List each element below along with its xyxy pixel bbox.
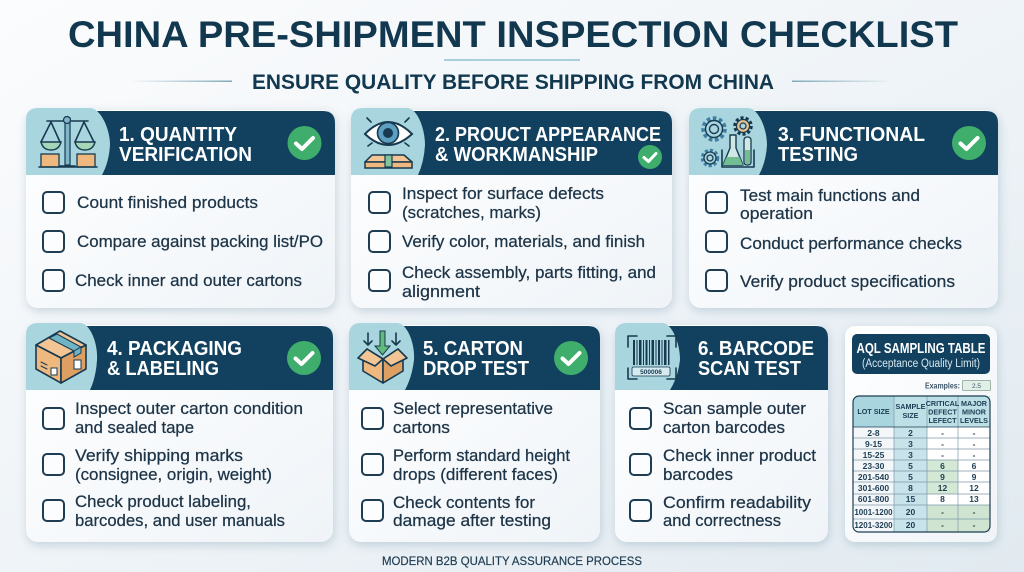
- checklist item: [362, 493, 551, 530]
- sampling table: 20: [906, 507, 915, 517]
- icon: barcode scanner frame: 500006: [640, 369, 662, 376]
- sampling table: 3: [908, 450, 913, 460]
- sampling table: 6: [972, 461, 977, 471]
- panel: 2 product appearance: [351, 108, 672, 308]
- checklist item: [706, 186, 920, 223]
- sampling table: 15-25: [863, 450, 885, 460]
- sampling table: CRITICAL: [926, 399, 960, 408]
- checklist item: Check product labeling,: [75, 492, 251, 511]
- checklist item: carton barcodes: [663, 418, 785, 437]
- heading: 5. CARTON: [423, 338, 523, 360]
- icon: check badge: [554, 341, 588, 375]
- checklist item: [630, 446, 816, 484]
- heading: TESTING: [778, 144, 858, 166]
- checklist item: and correctness: [663, 511, 781, 530]
- sampling table: 1201-3200: [854, 521, 893, 530]
- icon: barcode scanner frame: [628, 336, 676, 379]
- examples legend: Examples:: [925, 382, 960, 390]
- checklist item: Select representative: [393, 399, 553, 418]
- checklist item: [630, 399, 806, 437]
- sampling table: 23-30: [863, 461, 885, 471]
- checklist item: Test main functions and: [740, 186, 920, 205]
- icon: check badge: [287, 341, 321, 375]
- sampling table: DEFECT: [928, 408, 957, 416]
- sampling table: 15: [906, 494, 915, 504]
- checklist item: Inspect outer carton condition: [75, 399, 303, 418]
- icon: check badge: [288, 126, 322, 160]
- sampling table: -: [973, 439, 976, 449]
- heading: & WORKMANSHIP: [435, 144, 598, 166]
- checklist item: Conduct performance checks: [740, 234, 962, 253]
- examples legend: [925, 380, 990, 390]
- heading: [778, 124, 925, 166]
- sampling table: -: [973, 507, 976, 517]
- checklist item: Verify product specifications: [740, 272, 955, 291]
- icon: check badge: [638, 145, 662, 169]
- panel: AQL sampling table: [845, 326, 997, 542]
- checklist item: Check contents for: [393, 493, 535, 512]
- sampling table: -: [941, 450, 944, 460]
- examples legend: 2.5: [972, 383, 981, 390]
- title: CHINA PRE-SHIPMENT INSPECTION CHECKLIST: [68, 14, 958, 55]
- checklist item: (consignee, origin, weight): [75, 465, 272, 484]
- checklist item: [43, 399, 303, 437]
- heading: 1. QUANTITY: [119, 124, 238, 146]
- checklist item: Check inner product: [663, 446, 816, 465]
- panel: 5 carton drop test: [349, 323, 600, 542]
- checklist item: [369, 184, 604, 222]
- sampling table: -: [941, 428, 944, 438]
- footer: MODERN B2B QUALITY ASSURANCE PROCESS: [382, 554, 642, 568]
- sampling table: 201-540: [858, 472, 889, 482]
- heading: DROP TEST: [423, 358, 529, 380]
- table heading: (Acceptance Quality Limit): [862, 358, 980, 370]
- checklist item: Check assembly, parts fitting, and: [402, 263, 656, 282]
- checklist item: [43, 446, 272, 484]
- checklist item: [369, 263, 656, 301]
- checklist item: damage after testing: [393, 511, 551, 530]
- sampling table: -: [973, 520, 976, 530]
- panel: 3 functional testing: [689, 108, 998, 308]
- sampling table: -: [973, 428, 976, 438]
- heading: [698, 338, 814, 380]
- sampling table: LOT SIZE: [857, 407, 890, 416]
- sampling table: [853, 396, 990, 532]
- sampling table: 9-15: [865, 439, 882, 449]
- sampling table: LEVELS: [960, 416, 988, 425]
- checklist item: [362, 446, 570, 484]
- checklist item: operation: [740, 204, 813, 223]
- icon: check badge: [952, 126, 986, 160]
- icon: open carton with drop arrows: [358, 331, 407, 383]
- checklist item: and sealed tape: [75, 418, 194, 437]
- sampling table: 8: [908, 483, 913, 493]
- sampling table: 9: [940, 472, 945, 482]
- checklist item: Confirm readability: [663, 493, 812, 512]
- checklist item: [43, 492, 285, 530]
- sampling table: -: [941, 439, 944, 449]
- sampling table: 8: [940, 494, 945, 504]
- checklist item: [630, 493, 812, 530]
- checklist item: Perform standard height: [393, 446, 570, 465]
- icon: eye over box: [365, 118, 412, 168]
- sampling table: 20: [906, 520, 915, 530]
- heading: VERIFICATION: [119, 144, 252, 166]
- checklist item: Inspect for surface defects: [402, 184, 604, 203]
- checklist item: Count finished products: [77, 193, 258, 212]
- sampling table: -: [973, 450, 976, 460]
- checklist item: cartons: [393, 418, 450, 437]
- sampling table: MINOR: [962, 408, 987, 416]
- checklist item: Compare against packing list/PO: [77, 232, 323, 251]
- checklist item: Scan sample outer: [663, 399, 806, 418]
- checklist item: barcodes, and user manuals: [75, 511, 285, 530]
- heading: 6. BARCODE: [698, 338, 814, 360]
- sampling table: 6: [940, 461, 945, 471]
- icon: balance scale with cartons: [39, 116, 97, 167]
- checklist item: barcodes: [663, 465, 733, 484]
- sampling table: 1001-1200: [854, 508, 893, 517]
- icon: gears and flasks: [702, 118, 754, 167]
- table heading: [852, 334, 990, 374]
- heading: & LABELING: [107, 358, 219, 380]
- checklist item: Check inner and outer cartons: [75, 271, 302, 290]
- checklist item: Verify color, materials, and finish: [402, 232, 645, 251]
- heading: [435, 124, 661, 166]
- subtitle: ENSURE QUALITY BEFORE SHIPPING FROM CHINA: [252, 71, 774, 94]
- sampling table: 3: [908, 439, 913, 449]
- checklist item: Verify shipping marks: [75, 446, 243, 465]
- heading: 2. PROUCT APPEARANCE: [435, 124, 661, 146]
- sampling table: SIZE: [903, 411, 919, 420]
- heading: 4. PACKAGING: [107, 338, 242, 360]
- sampling table: MAJOR: [961, 399, 988, 408]
- sampling table: -: [941, 520, 944, 530]
- sampling table: 2: [908, 428, 913, 438]
- checklist item: drops (different faces): [393, 465, 558, 484]
- sampling table: 5: [908, 461, 913, 471]
- sampling table: 9: [972, 472, 977, 482]
- panel: 4 packaging and labeling: [26, 323, 333, 542]
- sampling table: SAMPLE: [896, 402, 926, 411]
- icon: sealed parcel: [36, 331, 86, 383]
- heading: 3. FUNCTIONAL: [778, 124, 925, 146]
- checklist item: [362, 399, 553, 437]
- sampling table: 301-600: [858, 483, 889, 493]
- sampling table: 2-8: [867, 428, 880, 438]
- heading: [423, 338, 529, 380]
- heading: [119, 124, 252, 166]
- heading: SCAN TEST: [698, 358, 801, 380]
- sampling table: 5: [908, 472, 913, 482]
- table heading: AQL SAMPLING TABLE: [856, 340, 986, 357]
- checklist item: (scratches, marks): [402, 203, 541, 222]
- sampling table: LEFECT: [929, 416, 957, 425]
- panel: 6 barcode scan test: [615, 323, 828, 542]
- panel: 1 quantity verification: [26, 108, 335, 308]
- sampling table: 13: [969, 494, 979, 504]
- checklist item: alignment: [402, 282, 480, 301]
- heading: [107, 338, 242, 380]
- sampling table: 601-800: [858, 494, 889, 504]
- sampling table: 12: [938, 483, 947, 493]
- sampling table: -: [941, 507, 944, 517]
- sampling table: 12: [969, 483, 979, 493]
